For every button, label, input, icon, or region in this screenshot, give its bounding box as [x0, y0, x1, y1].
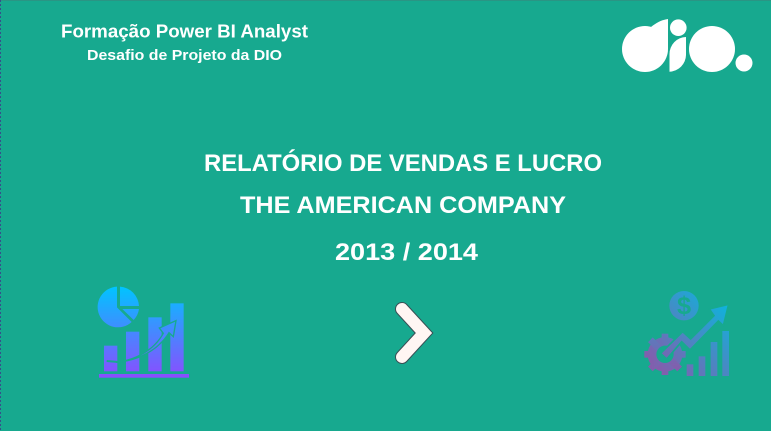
main title [204, 149, 602, 266]
main title: RELATÓRIO DE VENDAS E LUCRO [204, 149, 602, 177]
next arrow button [402, 309, 424, 357]
icon: sales chart with pie and rising arrow [98, 287, 189, 378]
main title: 2013 / 2014 [335, 239, 479, 266]
header: course title: Formação Power BI Analyst [61, 22, 308, 42]
main title: THE AMERICAN COMPANY [240, 192, 566, 219]
icon: profit with dollar, gear and rising arrow: $ [677, 292, 691, 320]
header: course title [61, 22, 308, 64]
logo: DIO [622, 19, 752, 72]
header: course title: Desafio de Projeto da DIO [87, 47, 282, 64]
icon: profit with dollar, gear and rising arrow [644, 291, 729, 376]
